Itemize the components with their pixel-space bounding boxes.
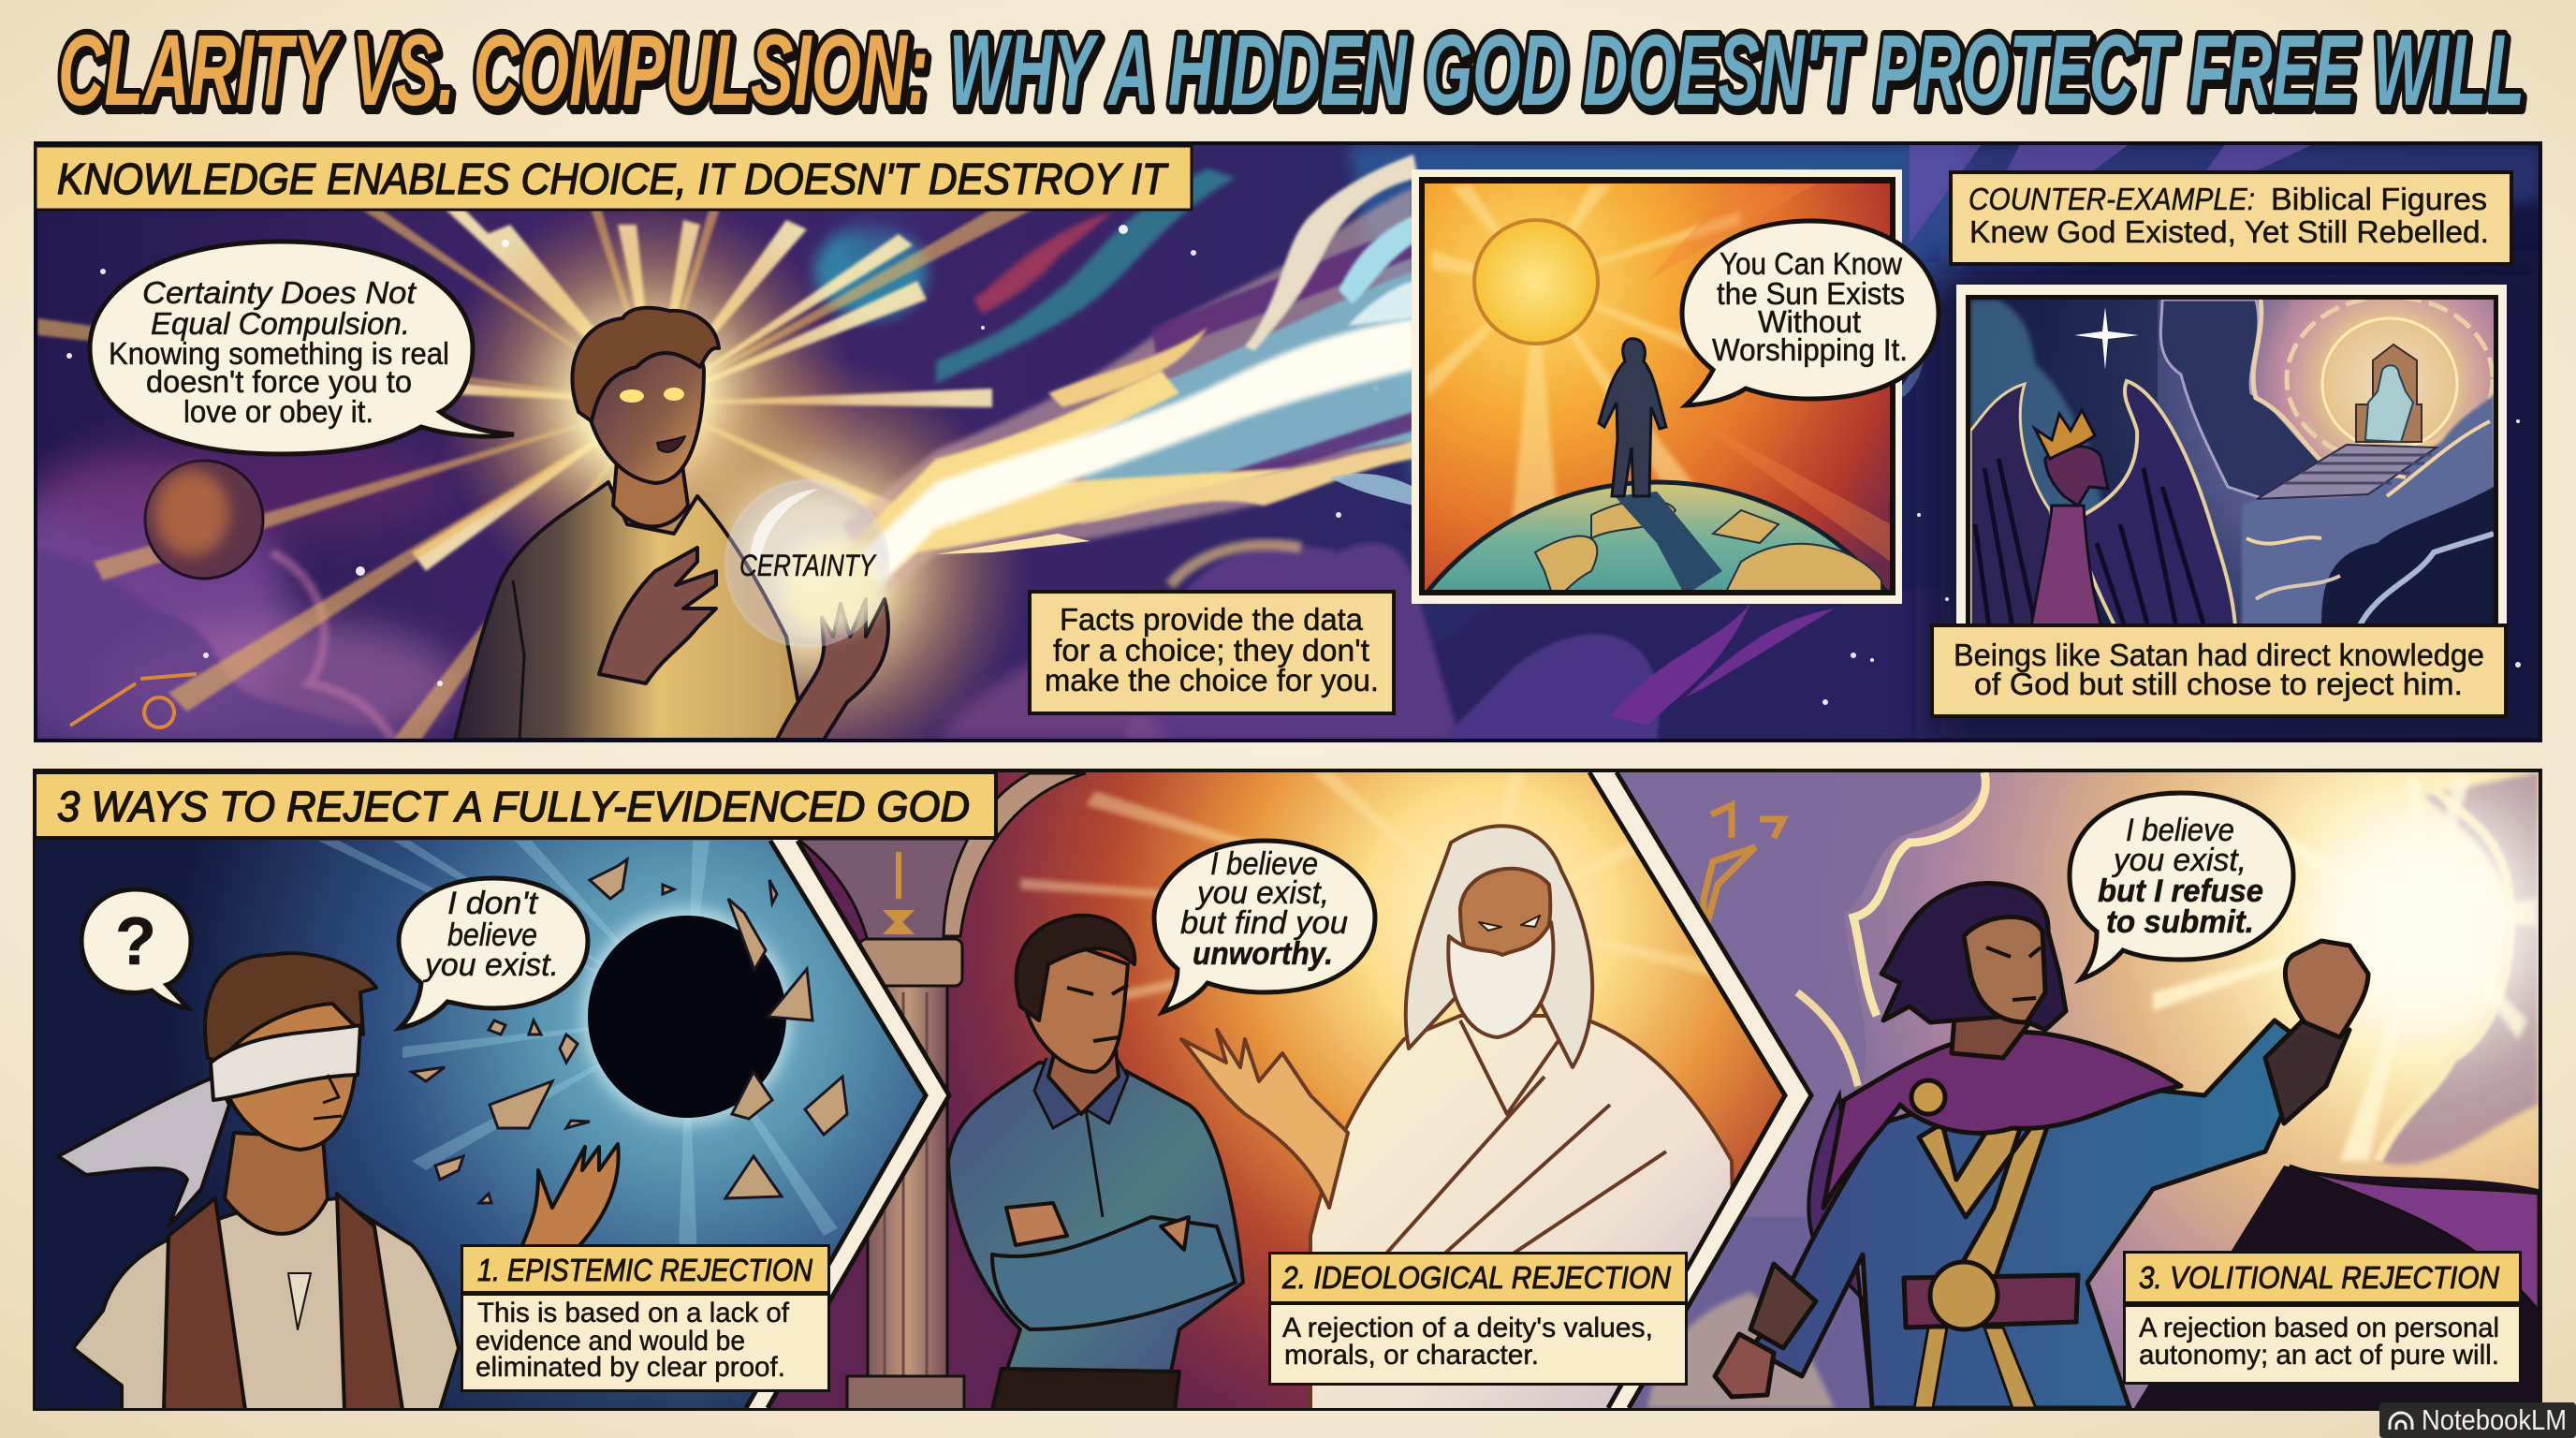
stars (66, 175, 2521, 705)
speech bubble: find you unworthy: you exist, (1195, 875, 1329, 911)
speech bubble: I don't believe you exist: I don't (447, 886, 539, 921)
caption: ideological rejection: 2. IDEOLOGICAL REJECTION (1281, 1260, 1671, 1295)
chevron outline 1 (746, 841, 949, 1408)
caption: ideological rejection: A rejection of a deity's values, (1282, 1313, 1653, 1343)
floating runes (1704, 805, 1783, 936)
speech bubble: certainty does not equal compulsion (90, 242, 514, 454)
crown (2035, 410, 2095, 459)
chevron dividers (36, 772, 2539, 1408)
collar and placket (1034, 1053, 1128, 1217)
speech bubble: certainty does not equal compulsion: doesn't force you to (146, 364, 412, 399)
caption: epistemic rejection: This is based on a lack of (477, 1298, 790, 1328)
speech bubble: you can know the sun exists: the Sun Exists (1717, 276, 1905, 311)
white hair (1406, 826, 1592, 1067)
caption: epistemic rejection: evidence and would be (476, 1326, 745, 1357)
chevron outline 2 (1589, 772, 1811, 1408)
caption: volitional rejection: A rejection based on personal (2139, 1313, 2499, 1343)
sub-panel: satan before the throne (1956, 285, 2507, 632)
left blue cloud (1970, 300, 2106, 524)
speech bubble: refuse to submit: I believe (2126, 813, 2234, 848)
flowing cape (2134, 1166, 2539, 1408)
swirling nebula bands upper right (1348, 145, 1966, 487)
planet (145, 461, 263, 579)
blindfold (211, 1025, 360, 1100)
brow and mouth (1986, 947, 2041, 1000)
caption: volitional rejection: autonomy; an act of pure will. (2139, 1340, 2499, 1371)
robe (1750, 1020, 2312, 1408)
caption: facts provide the data: Facts provide the data (1060, 602, 1364, 637)
cosmic background with light rays (37, 145, 2539, 739)
upper wisps (1245, 154, 1418, 351)
belt and trousers (992, 1369, 1179, 1410)
dark cloud (2160, 300, 2331, 501)
question bubble (81, 889, 191, 1008)
hair (205, 953, 376, 1063)
caption: counter-example (1951, 172, 2511, 264)
left lavender nebula (0, 468, 290, 749)
sun scene (1362, 183, 1952, 1072)
panel 1: epistemic rejection scene (36, 839, 934, 1410)
speech bubble: I don't believe you exist: believe (447, 917, 537, 953)
panel 3: volitional rejection scene (1610, 772, 2549, 1409)
pink halo edge (2289, 300, 2494, 451)
hair (572, 308, 719, 421)
title part 1: clarity vs compulsion: CLARITY VS. COMPULSION: (58, 13, 929, 126)
certainty sphere (726, 481, 887, 646)
light beam from the sphere (842, 154, 1418, 599)
caption: facts provide the data (1030, 592, 1394, 713)
crossed arms (992, 1217, 1236, 1329)
shattered shards (412, 859, 847, 1203)
raised fist (2285, 941, 2368, 1037)
torso with vest (73, 1198, 459, 1410)
raised hand (599, 548, 716, 683)
title (58, 13, 2525, 126)
face (1460, 869, 1550, 974)
caption: epistemic rejection: 1. EPISTEMIC REJECTION (477, 1253, 812, 1287)
nose and mouth (314, 1075, 342, 1119)
lower hand (777, 599, 888, 740)
skirt stripes (1914, 1328, 2036, 1408)
caption: counter-example: Biblical Figures (2271, 182, 2487, 216)
caption: epistemic rejection (461, 1244, 830, 1392)
caption: counter-example: Knew God Existed, Yet Still Rebelled. (1969, 214, 2489, 249)
speech bubble: you can know the sun exists (1682, 221, 1939, 405)
stairs (2257, 445, 2437, 499)
speech bubble: you can know the sun exists: Worshipping It. (1712, 332, 1908, 367)
sub-panel: sun and earth (1362, 169, 1952, 1072)
outer cream beam (842, 187, 1413, 599)
torso and shirt (455, 482, 805, 740)
clouds (1617, 772, 1984, 1217)
bottom-left clouds (1647, 1292, 1835, 1408)
speech bubble: find you unworthy: I believe (1210, 846, 1318, 882)
throne with seated figure (2356, 345, 2422, 442)
beard (1448, 922, 1553, 1037)
wings (1970, 384, 2054, 627)
panel: three ways to reject (33, 769, 2549, 1411)
belt buckle (1930, 1262, 1998, 1329)
caption: ideological rejection (1268, 1252, 1688, 1386)
head (584, 330, 704, 483)
yellow fan (842, 370, 1292, 590)
neck (613, 449, 688, 526)
lower clouds (2242, 393, 2494, 627)
neck (1952, 992, 2031, 1058)
lower dark nebula (1408, 523, 1927, 738)
caption: beings like satan (1932, 625, 2506, 716)
sun panel frame (1412, 169, 1902, 604)
panel 2: ideological rejection scene (768, 772, 1788, 1410)
satan head (2045, 447, 2108, 506)
figure: man holding certainty sphere (455, 308, 888, 740)
signature glyph (70, 674, 197, 727)
eyes and mouth (1067, 985, 1128, 1041)
speech bubble: find you unworthy: unworthy. (1193, 936, 1333, 972)
raised forearm (2265, 1016, 2349, 1123)
hand (520, 1144, 619, 1255)
caption: volitional rejection (2123, 1251, 2522, 1385)
neck (225, 1133, 328, 1234)
robe (1310, 1016, 1736, 1410)
caption: beings like satan: Beings like Satan had direct knowledge (1954, 638, 2484, 672)
satan body (2031, 506, 2101, 627)
face (1964, 917, 2045, 1022)
teal band (1082, 271, 1412, 482)
speech bubble: you can know the sun exists: Without (1758, 304, 1861, 339)
standing person (1599, 339, 1666, 496)
lower arm and fist (1750, 1264, 1816, 1348)
hair (1017, 916, 1134, 1020)
star (2074, 307, 2139, 370)
speech bubble: certainty does not equal compulsion: Equal Compulsion. (151, 306, 410, 341)
dark purple streaks (1151, 225, 1413, 482)
teal and crimson nebula streaks (814, 225, 927, 318)
sphere label: CERTAINTY (739, 549, 877, 582)
ribbon ends (58, 1077, 229, 1226)
speech bubble: find you unworthy (1154, 841, 1375, 1012)
sun disc (1474, 220, 1598, 344)
panel: knowledge enables choice (34, 141, 2542, 742)
speech bubble: certainty does not equal compulsion: Certainty Does Not (142, 275, 417, 310)
god figure (1181, 826, 1736, 1410)
speech bubble: I don't believe you exist (399, 878, 588, 1028)
speech bubble: certainty does not equal compulsion: Knowing something is real (109, 336, 449, 371)
halo ring (2322, 318, 2457, 449)
cape on shoulders (1823, 1032, 2181, 1208)
long hair (1881, 883, 2066, 1030)
gold sash (1919, 1105, 2050, 1283)
glowing eyes (620, 389, 644, 403)
caption: counter-example: COUNTER-EXAMPLE: (1969, 182, 2255, 216)
man with crossed arms (948, 916, 1243, 1410)
earth (1362, 482, 1952, 1072)
frame (33, 769, 2542, 1411)
header: knowledge enables choice: KNOWLEDGE ENABLES CHOICE, IT DOESN'T DESTROY IT (57, 154, 1169, 203)
caption: facts provide the data: for a choice; they don't (1053, 633, 1369, 668)
arch and column (798, 839, 996, 941)
neck (1048, 1030, 1119, 1114)
speech bubble: refuse to submit (2070, 793, 2293, 979)
speech bubble: you can know the sun exists: You Can Know (1720, 246, 1902, 281)
hero figure (1715, 883, 2368, 1408)
blindfolded man (58, 953, 619, 1410)
belt (1904, 1275, 2078, 1328)
head (1022, 936, 1128, 1072)
golden rays from the head (37, 212, 1033, 739)
speech bubble: refuse to submit: you exist, (2112, 843, 2247, 878)
caption: facts provide the data: make the choice for you. (1045, 663, 1379, 697)
person shadow (1615, 492, 1722, 595)
white core (852, 318, 1415, 585)
speech bubble: find you unworthy: but find you (1180, 905, 1348, 941)
lower wisps (1076, 440, 1413, 524)
shirt (948, 1063, 1243, 1376)
panel frame (34, 141, 2542, 742)
caption: volitional rejection: 3. VOLITIONAL REJECTION (2139, 1260, 2499, 1295)
question bubble: ? (115, 904, 156, 979)
speech bubble: refuse to submit: but I refuse (2098, 873, 2263, 909)
gesturing hand and arm (1181, 1030, 1348, 1208)
caption: epistemic rejection: eliminated by clear proof. (476, 1352, 785, 1383)
speech bubble: refuse to submit: to submit. (2106, 904, 2254, 940)
god eyes (1479, 916, 1540, 931)
caption: beings like satan: of God but still chose to reject him. (1974, 667, 2463, 701)
cloak brooch (1911, 1080, 1945, 1114)
speech bubble: I don't believe you exist: you exist. (423, 947, 559, 983)
black void (582, 908, 792, 1125)
header: three ways: 3 WAYS TO REJECT A FULLY-EVIDENCED GOD (57, 783, 970, 830)
head (213, 992, 358, 1150)
caption: ideological rejection: morals, or character. (1284, 1340, 1539, 1371)
speech bubble: certainty does not equal compulsion: love or obey it. (183, 394, 373, 429)
mouth (657, 436, 685, 452)
